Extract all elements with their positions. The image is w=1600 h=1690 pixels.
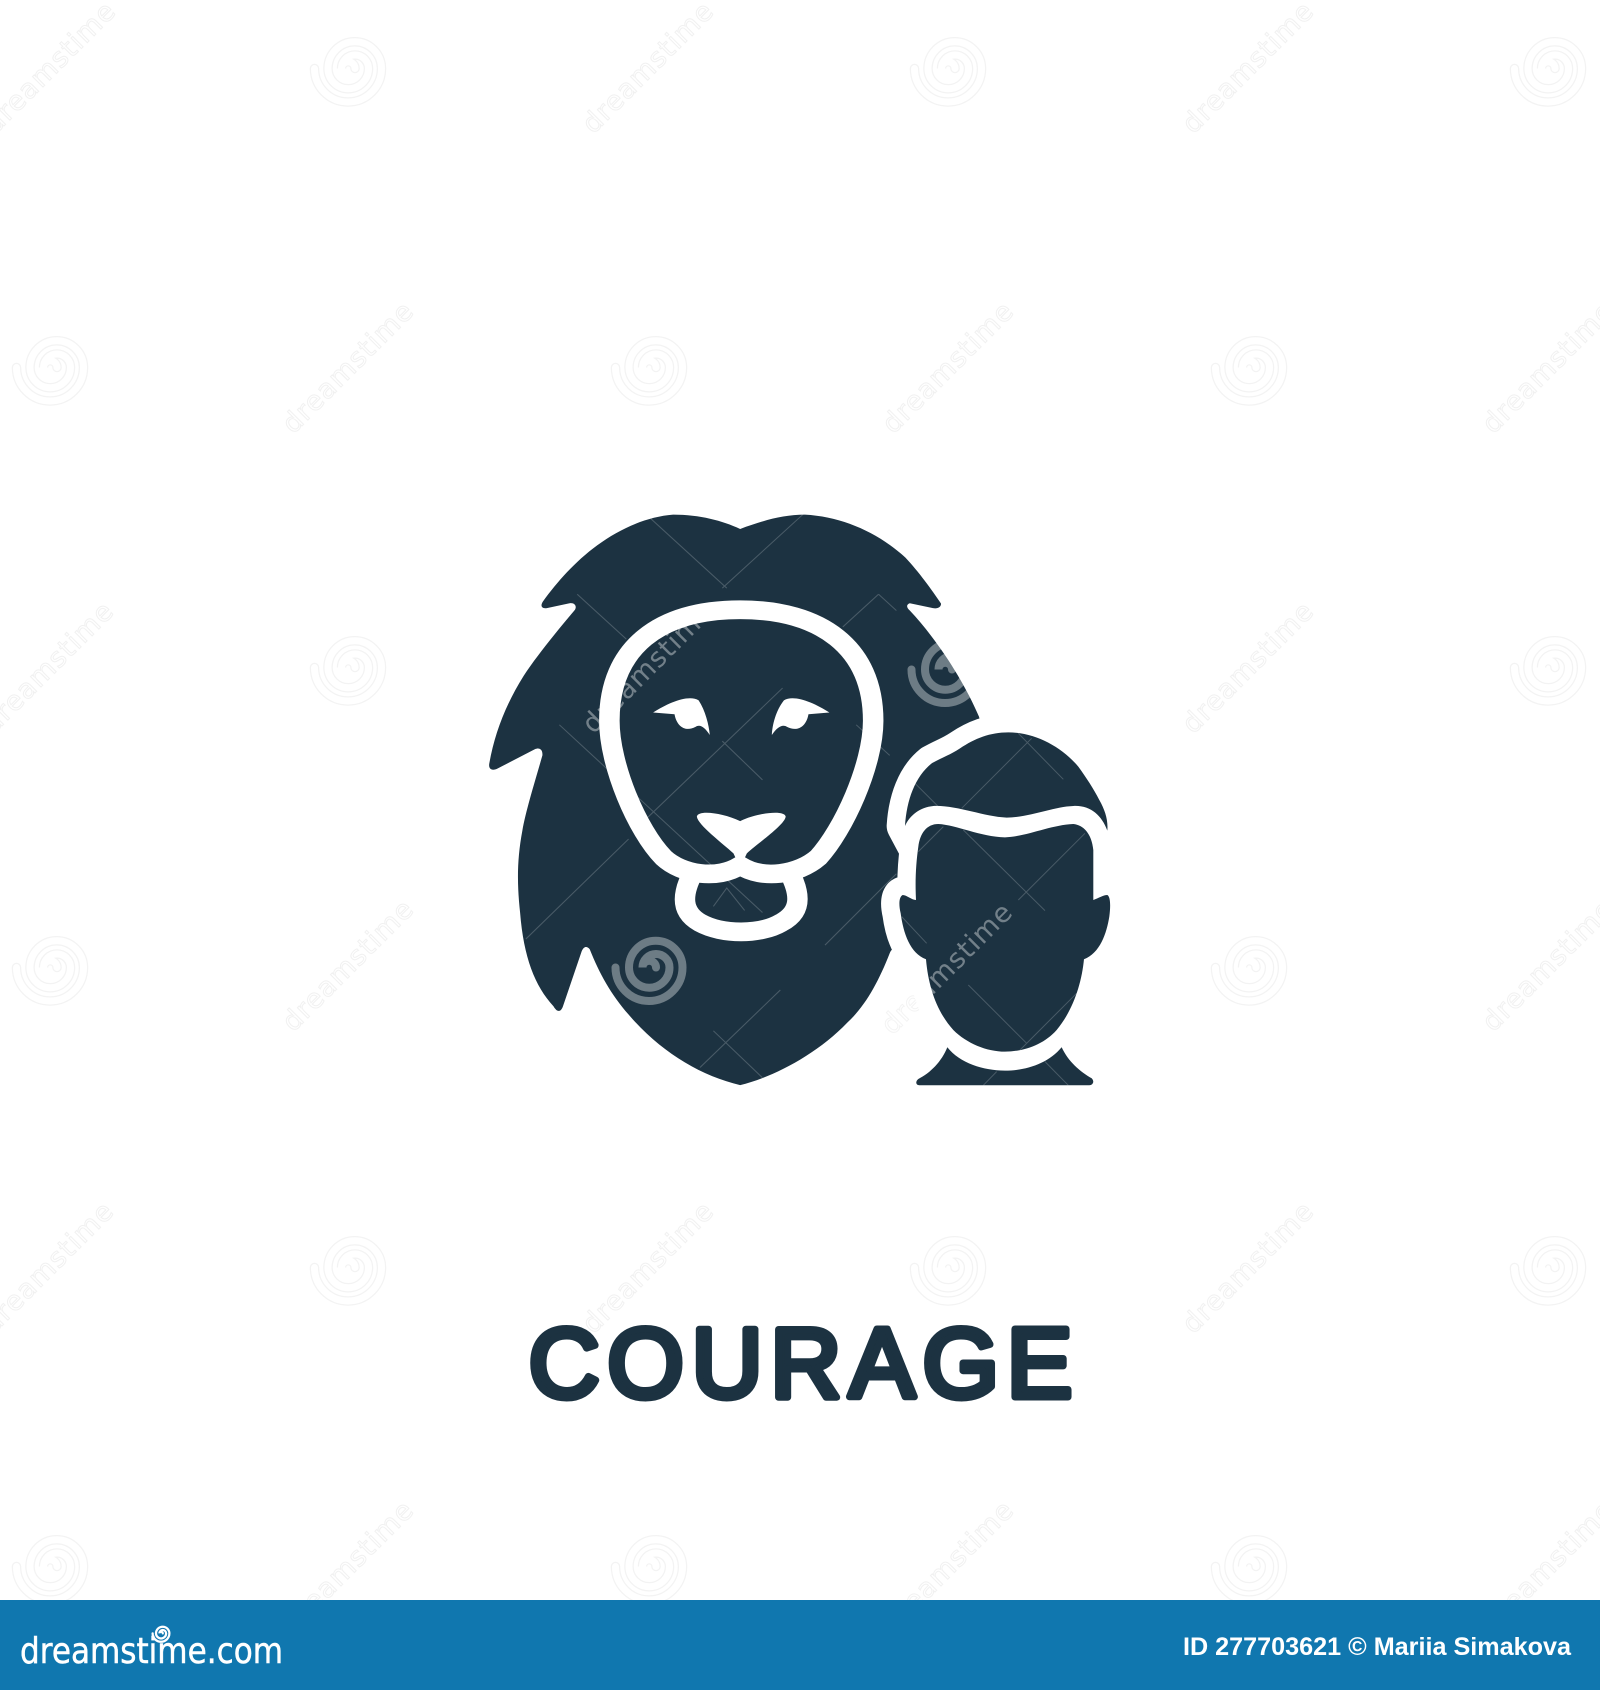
man hair: [905, 732, 1107, 831]
footer logo spiral: [153, 1627, 169, 1642]
faint background watermark text: dreamstime: [876, 1495, 1020, 1639]
icon: lion head: [489, 515, 990, 1085]
lion chin: [685, 870, 798, 932]
footer band: [0, 1600, 1600, 1690]
man face: [899, 824, 1110, 1052]
title: COURAGE: [529, 1308, 1080, 1418]
faint background watermark text: dreamstime: [276, 1495, 420, 1639]
faint background watermark text: dreamstime: [576, 1196, 720, 1340]
faint background watermark text: dreamstime: [576, 0, 720, 140]
footer credit: ID 277703621 © Mariia Simakova: [1183, 1633, 1572, 1661]
watermark text over lion and man: [576, 596, 1019, 1041]
faint background watermark text: dreamstime: [276, 296, 420, 440]
watermark text over lion and man: dreamstime: [576, 596, 720, 740]
faint background watermark text: dreamstime: [876, 296, 1020, 440]
footer logo: dreamstime.com: [20, 1631, 283, 1672]
lion right eye: [772, 698, 829, 735]
lion face outline: [609, 610, 873, 874]
watermark spirals over lion: [616, 643, 978, 1001]
thin watermark lines on lion: [526, 515, 896, 1078]
man neck: [916, 1047, 1093, 1085]
faint background watermark text: dreamstime: [1176, 1196, 1320, 1340]
faint background watermark text: dreamstime: [875, 897, 1019, 1041]
white halo around man: [899, 732, 1110, 1052]
icon: man head: [899, 732, 1110, 1085]
thin watermark lines on man: [902, 733, 1085, 1085]
faint background watermark text: dreamstime: [276, 894, 420, 1038]
faint background watermark text: dreamstime: [1176, 596, 1320, 740]
watermark text over lion and man: dreamstime: [875, 897, 1019, 1041]
lion left eye: [653, 698, 710, 735]
lion mane: [489, 515, 990, 1085]
faint background watermark text: dreamstime: [1176, 0, 1320, 140]
lion nose: [697, 813, 786, 868]
